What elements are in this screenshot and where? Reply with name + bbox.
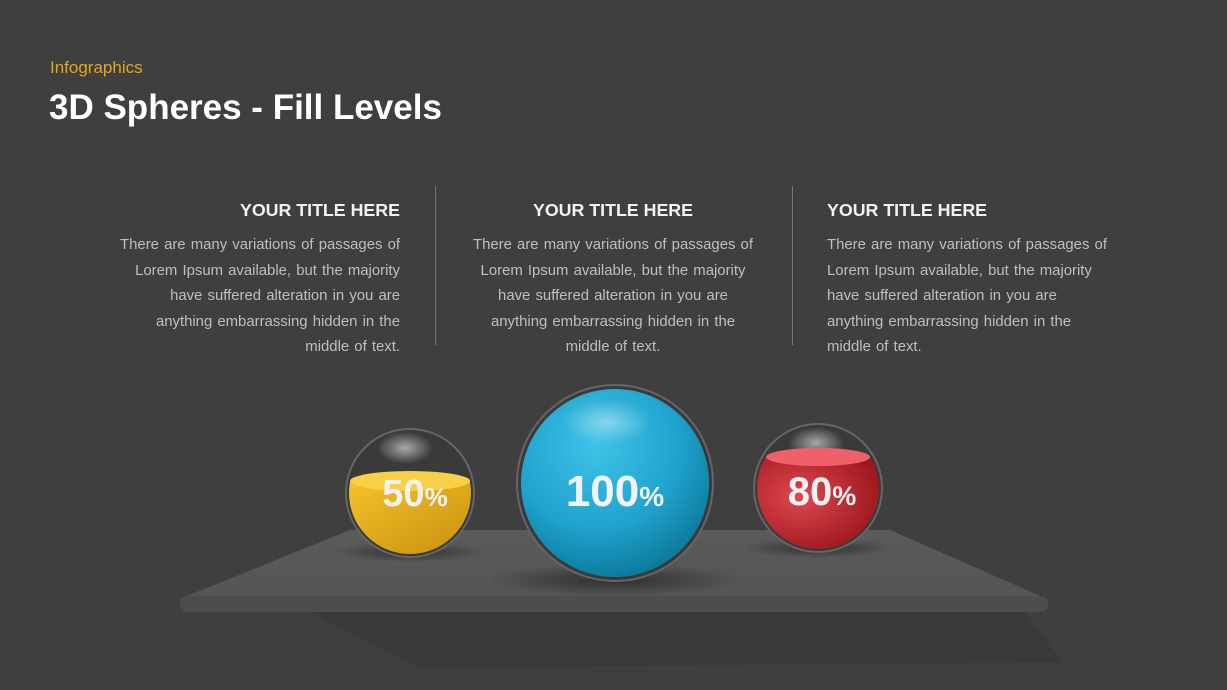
text block 3: YOUR TITLE HERE	[827, 200, 987, 220]
shelf with spheres	[180, 384, 1048, 612]
text block 1: have suffered alteration in you are	[170, 288, 400, 304]
sphere red 80%	[750, 424, 890, 557]
text block 2: There are many variations of passages of	[473, 237, 753, 253]
shelf front	[180, 596, 1048, 612]
text block 1	[120, 200, 400, 355]
sphere blue 100%: 100%	[566, 467, 664, 516]
text block 2: Lorem Ipsum available, but the majority	[481, 263, 745, 279]
text block 2: middle of text.	[566, 339, 660, 355]
sphere yellow 50%	[340, 429, 480, 561]
text block 1: YOUR TITLE HERE	[240, 200, 400, 220]
text block 2: YOUR TITLE HERE	[533, 200, 693, 220]
text block 3: have suffered alteration in you are	[827, 288, 1057, 304]
text block 3: middle of text.	[827, 339, 922, 355]
text block 1: middle of text.	[305, 339, 400, 355]
text block 2: have suffered alteration in you are	[498, 288, 728, 304]
text block 3: Lorem Ipsum available, but the majority	[827, 263, 1092, 279]
subtitle: Infographics	[50, 58, 143, 77]
sphere blue 100%	[517, 385, 713, 581]
text block 2: anything embarrassing hidden in the	[491, 314, 735, 330]
text block 3	[827, 200, 1108, 355]
text block 2	[473, 200, 754, 355]
sphere red 80%: 80%	[788, 470, 856, 514]
text block 1: There are many variations of passages of	[120, 237, 400, 253]
shelf top	[182, 530, 1045, 598]
shelf shadow	[310, 612, 1062, 668]
text block 3: There are many variations of passages of	[827, 237, 1107, 253]
text block 1: anything embarrassing hidden in the	[156, 314, 400, 330]
sphere yellow 50%: 50%	[382, 473, 448, 515]
text block 1: Lorem Ipsum available, but the majority	[135, 263, 400, 279]
text block 3: anything embarrassing hidden in the	[827, 314, 1071, 330]
title: 3D Spheres - Fill Levels	[49, 88, 442, 127]
